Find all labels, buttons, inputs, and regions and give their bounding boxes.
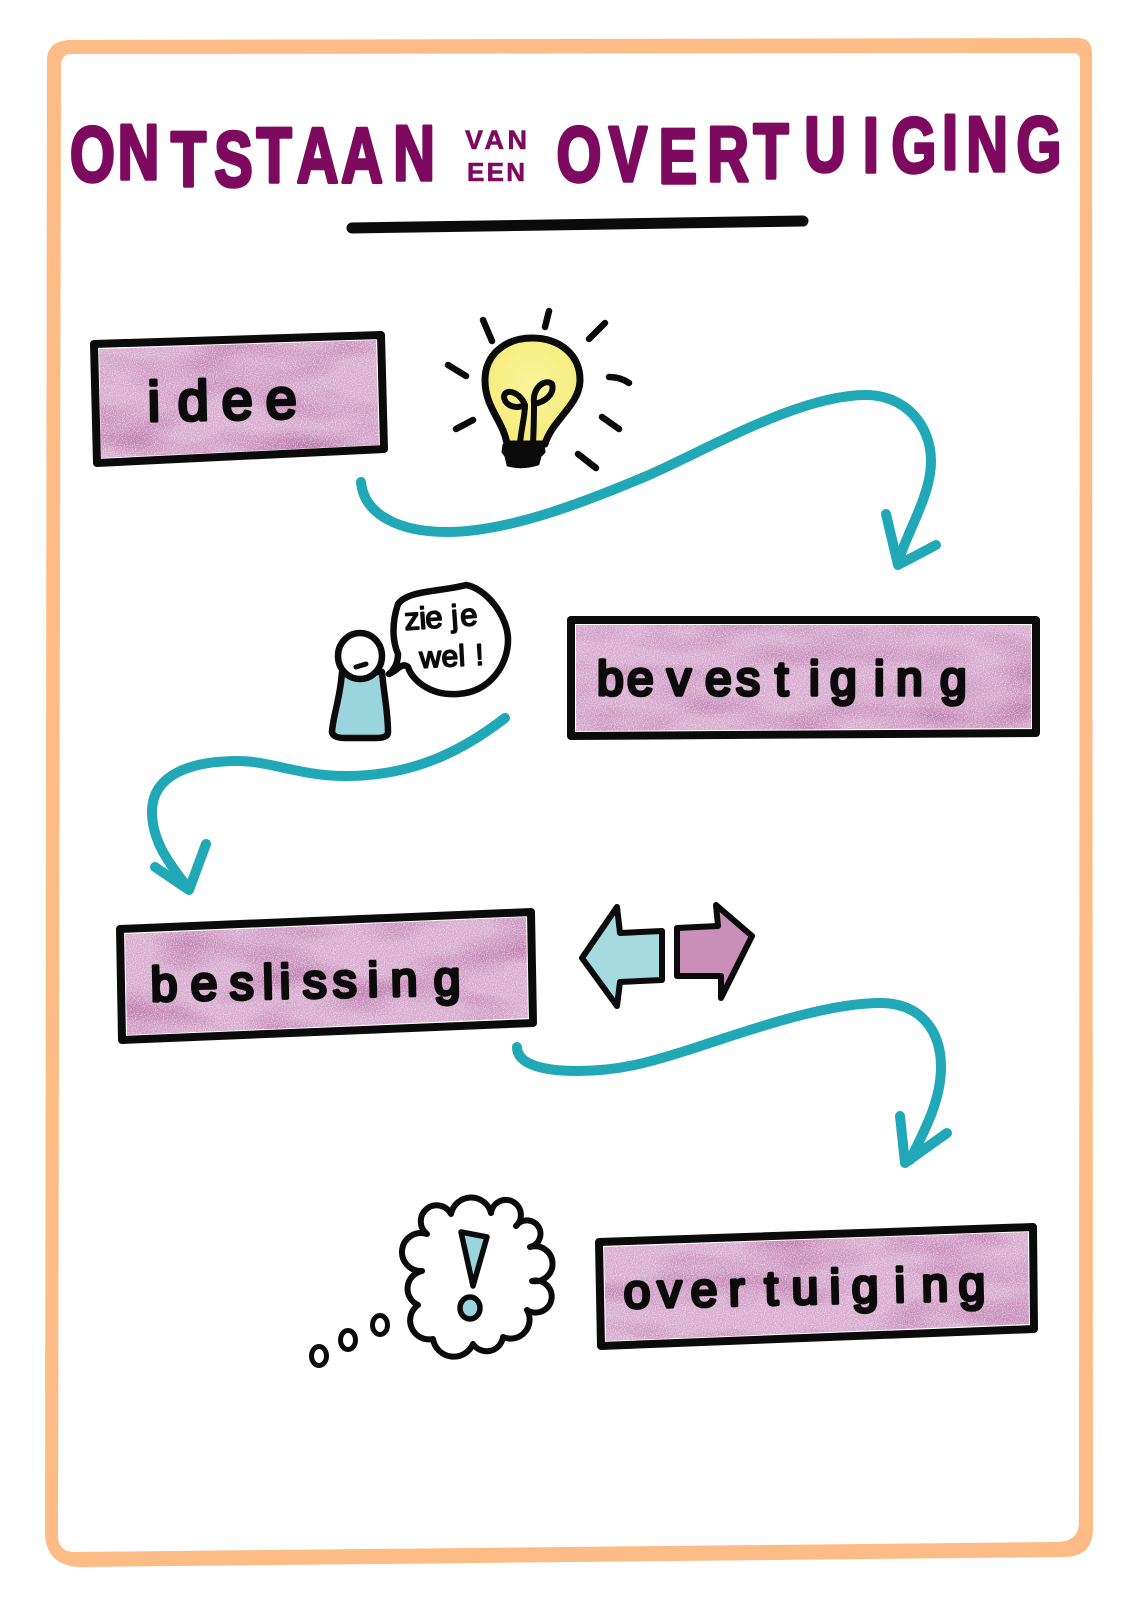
right arrow: [677, 905, 752, 998]
speech bubble: [389, 585, 508, 694]
exclamation wedge: [461, 1232, 487, 1286]
label: bevestiging: bevestiging: [597, 653, 967, 706]
title word: ONTSTAAN: ONTSTAAN: [70, 109, 435, 203]
arrow: beslissing to overtuiging: [517, 1003, 947, 1163]
arrow: idee to bevestiging: [361, 395, 936, 565]
person body: [332, 672, 388, 738]
left arrow: [582, 907, 662, 1006]
icon: double arrow: [582, 905, 752, 1006]
thought bubbles: [312, 1316, 388, 1366]
title word: OVERTUIGING: OVERTUIGING: [556, 99, 1061, 200]
person head: [338, 633, 382, 679]
arrow: bevestiging to beslissing: [152, 718, 505, 890]
box: overtuiging: [599, 1227, 1034, 1346]
label: beslissing: beslissing: [150, 953, 461, 1012]
icon: person saying zie je wel: wel !: [418, 639, 485, 675]
icon: person saying zie je wel: [332, 585, 508, 738]
label: overtuiging: overtuiging: [623, 1258, 986, 1319]
exclamation dot: [460, 1297, 480, 1319]
box: beslissing: [120, 912, 533, 1040]
cloud outline: [402, 1197, 553, 1357]
box: bevestiging: [571, 620, 1036, 736]
title word: VAN: VAN: [465, 125, 527, 155]
icon: thought cloud with exclamation mark: [312, 1197, 553, 1366]
title: [70, 99, 1061, 203]
speech text: zie je: [403, 597, 479, 637]
light rays: [448, 311, 629, 468]
box: idee: [94, 335, 384, 463]
title underline: [352, 221, 803, 228]
icon: light bulb: [448, 311, 629, 468]
title word: EEN: EEN: [467, 157, 525, 187]
person mouth: [356, 664, 366, 667]
label: idee: idee: [147, 367, 297, 433]
